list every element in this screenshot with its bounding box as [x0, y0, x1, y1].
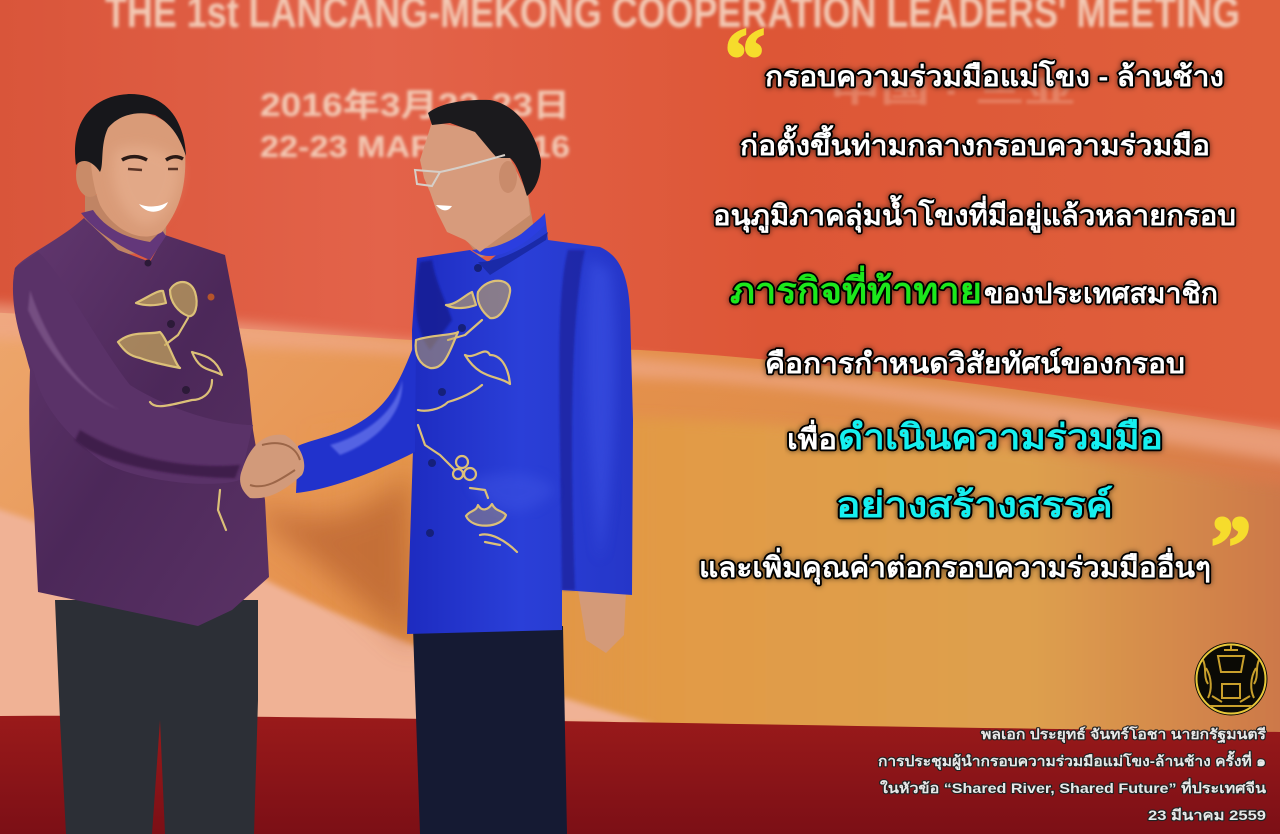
- right man neck: [455, 195, 535, 258]
- figure: left man in purple jacket: [13, 94, 269, 834]
- left man embroidery: [118, 282, 226, 530]
- right man trousers: [413, 626, 567, 834]
- right man arm: [296, 340, 416, 493]
- quote line 6 lead: เพื่อ: [787, 419, 837, 455]
- quote line 6 highlight cyan: ดำเนินความร่วมมือ: [838, 418, 1163, 457]
- caption line 4: 23 มีนาคม 2559: [1148, 807, 1266, 823]
- quote line 2: ก่อตั้งขึ้นท่ามกลางกรอบความร่วมมือ: [740, 124, 1210, 161]
- quote line 8: และเพิ่มคุณค่าต่อกรอบความร่วมมืออื่นๆ: [699, 547, 1211, 585]
- left man buttons: [144, 260, 190, 394]
- caption line 2: การประชุมผู้นำกรอบความร่วมมือแม่โขง-ล้านช้าง ครั้งที่ ๑: [878, 750, 1266, 770]
- left man collar: [81, 210, 166, 260]
- left man trousers: [55, 600, 258, 834]
- left man hair: [75, 94, 186, 172]
- closing quotation mark: ”: [1211, 498, 1251, 594]
- right man hand at side: [578, 590, 626, 653]
- left man eyes: [122, 157, 183, 160]
- left man smile: [139, 202, 168, 212]
- left man neck: [85, 195, 168, 255]
- right man head: [415, 100, 541, 252]
- caption: [878, 725, 1267, 823]
- right man smile: [436, 205, 452, 210]
- caption line 1: พลเอก ประยุทธ์ จันทร์โอชา นายกรัฐมนตรี: [981, 725, 1267, 744]
- left man pin: [208, 294, 214, 300]
- quote line 4 remainder: ของประเทศสมาชิก: [984, 278, 1218, 309]
- icon: government seal: [1194, 642, 1268, 716]
- quote line 1: กรอบความร่วมมือแม่โขง - ล้านช้าง: [765, 59, 1224, 92]
- soft shadow of figures on backdrop: [255, 470, 415, 650]
- right man hair: [428, 100, 541, 196]
- quote line 7 highlight cyan: อย่างสร้างสรรค์: [836, 485, 1113, 525]
- right man embroidery: [416, 281, 517, 552]
- figure: right man in blue jacket: [296, 100, 633, 834]
- right man jacket sheen: [416, 260, 452, 350]
- left man sleeve: [13, 252, 253, 484]
- right man collar: [472, 213, 545, 256]
- background banner text (out of focus): 2016年3月22-23日: [260, 87, 570, 123]
- right man glasses: [415, 155, 505, 186]
- quote line 5: คือการกำหนดวิสัยทัศน์ของกรอบ: [765, 348, 1185, 379]
- quote line 4 highlight green: ภารกิจที่ท้าทาย: [730, 265, 982, 311]
- caption line 3: ในหัวข้อ “Shared River, Shared Future” ที่ประเทศจีน: [880, 778, 1266, 796]
- background banner text (out of focus): 22-23 MARCH 2016: [260, 129, 570, 164]
- background banner text (out of focus): 中国 · 三亚: [830, 76, 1075, 109]
- right man buttons: [426, 264, 482, 537]
- opening quotation mark: “: [725, 10, 765, 106]
- quote text: [699, 59, 1236, 585]
- right man jacket: [407, 214, 633, 634]
- background banner text (out of focus): [105, 0, 1240, 164]
- left man jacket: [13, 218, 269, 626]
- red carpet floor: [0, 716, 1280, 834]
- quote line 3: อนุภูมิภาคลุ่มน้ำโขงที่มีอยู่แล้วหลายกรอบ: [713, 194, 1236, 233]
- left man head: [75, 94, 186, 237]
- handshake: [240, 435, 304, 498]
